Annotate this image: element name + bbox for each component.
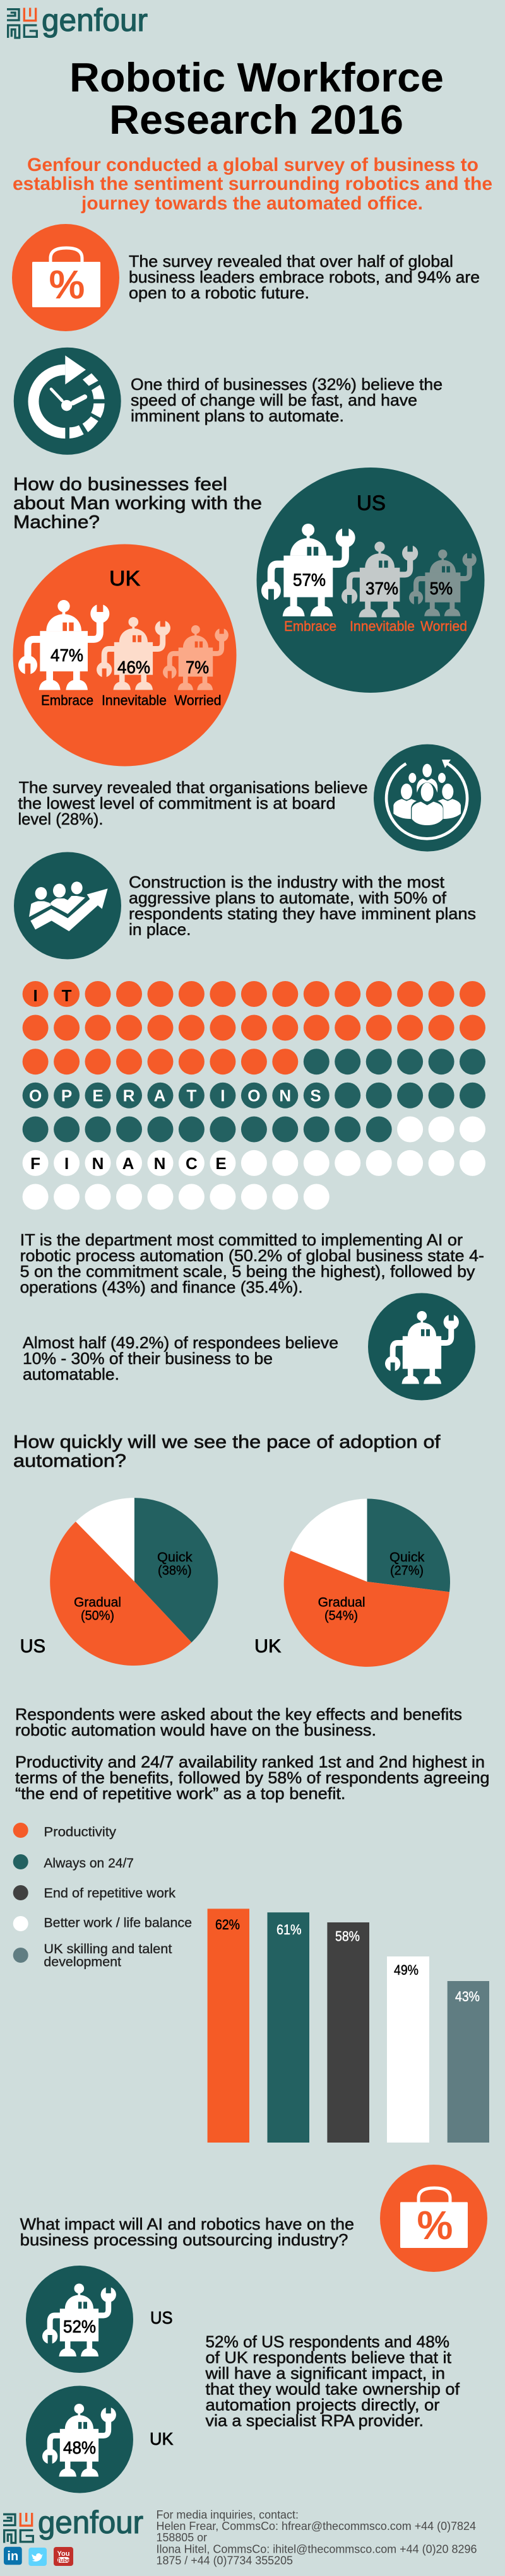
- icon: YouTube: You: [57, 2550, 69, 2558]
- legend: productivity: [13, 1823, 116, 1840]
- bar: always on: 61%: [276, 1922, 302, 1938]
- intro subtitle: journey towards the automated office.: [81, 193, 423, 214]
- text: construction industry: Construction is the industry with the most: [129, 873, 445, 891]
- heading: man working with the machine: about Man working with the: [13, 493, 262, 514]
- icon: clock with arrow: [14, 348, 121, 455]
- title: Research 2016: [109, 97, 403, 143]
- legend: UK skilling: development: [44, 1955, 121, 1970]
- legend: UK skilling: [13, 1941, 172, 1970]
- text: board commitment: the lowest level of commitment is at board: [18, 794, 336, 813]
- bar: productivity: [208, 1908, 249, 2143]
- media contact text: Ilona Hitel, CommsCo: ihitel@thecommsco.com +44 (0)20 8296: [157, 2543, 477, 2555]
- letters: OPERATIONS: N: [279, 1086, 291, 1105]
- UK category labels: [41, 693, 221, 708]
- letters: OPERATIONS: R: [123, 1086, 135, 1105]
- letters: FINANCE: N: [92, 1154, 104, 1173]
- heading: BPO impact: business processing outsourcing industry?: [20, 2230, 348, 2249]
- bar: UK skilling: 43%: [455, 1989, 480, 2004]
- letters: OPERATIONS: I: [220, 1086, 225, 1105]
- text: IT department: IT is the department most committed to implementing AI or: [20, 1230, 463, 1249]
- text: IT department: [20, 1230, 484, 1297]
- robot: US inevitable: [342, 541, 418, 617]
- UK percentages: 46%: [117, 657, 150, 677]
- icon: YouTube: [54, 2547, 73, 2566]
- letters: OPERATIONS: T: [186, 1086, 196, 1105]
- UK category labels: Embrace: [41, 693, 93, 708]
- bar chart: benefits: [208, 1908, 489, 2143]
- US pie labels: (50%): [81, 1609, 114, 1623]
- text: productivity ranking: terms of the benefits, followed by 58% of respondents agreeing: [15, 1768, 490, 1787]
- text: IT department: robotic process automation (50.2% of global business state 4-: [20, 1246, 484, 1265]
- text: significant impact: via a specialist RPA provider.: [206, 2411, 424, 2430]
- UK percentages: [50, 645, 209, 677]
- US pie caption: US: [20, 1636, 45, 1657]
- letters: FINANCE: E: [215, 1154, 227, 1173]
- media contact text: Helen Frear, CommsCo: hfrear@thecommsco.com +44 (0)7824: [157, 2520, 476, 2532]
- bar: always on: [268, 1912, 309, 2143]
- heading: man working with the machine: [13, 474, 262, 532]
- UK pie labels: [318, 1550, 425, 1623]
- text: construction industry: respondents stating they have imminent plans: [129, 904, 476, 923]
- header logo: genfour: [42, 3, 148, 38]
- UK pie labels: Quick: [389, 1550, 425, 1565]
- US pie labels: Gradual: [74, 1595, 121, 1610]
- pie chart: US: [50, 1498, 218, 1666]
- icon: robot badge: [368, 1293, 475, 1401]
- legend: always on: [13, 1854, 134, 1871]
- media contact text: 1875 / +44 (0)7734 355205: [157, 2554, 293, 2567]
- UK percentages: 7%: [186, 657, 209, 677]
- text: board commitment: The survey revealed that organisations believe: [19, 778, 368, 797]
- US percentages: 37%: [365, 579, 398, 598]
- robot: US embrace: [261, 524, 355, 616]
- letters: OPERATIONS: P: [61, 1086, 72, 1105]
- US category labels: [284, 618, 467, 634]
- robot badge: UK 48%: 48%: [63, 2438, 96, 2457]
- US label: US: [150, 2308, 173, 2327]
- letters: IT: I: [33, 986, 38, 1005]
- text: significant impact: 52% of US respondents and 48%: [206, 2332, 449, 2351]
- intro subtitle: Genfour conducted a global survey of business to: [27, 155, 478, 175]
- letters: OPERATIONS: A: [154, 1086, 166, 1105]
- text: significant impact: of UK respondents believe that it: [206, 2348, 452, 2367]
- US percentages: 57%: [293, 570, 326, 590]
- text: IT department: operations (43%) and finance (35.4%).: [20, 1278, 303, 1297]
- text: embrace robots: open to a robotic future.: [129, 283, 309, 302]
- text: productivity ranking: “the end of repetitive work” as a top benefit.: [15, 1784, 346, 1803]
- text: significant impact: automation projects directly, or: [206, 2396, 440, 2414]
- text: speed of change: speed of change will be fast, and have: [131, 391, 417, 409]
- heading: man working with the machine: Machine?: [13, 512, 100, 532]
- letters: IT: [33, 986, 72, 1005]
- robot: US worried: [409, 550, 477, 616]
- panel: US sentiment: [256, 468, 485, 693]
- panel: UK sentiment: [13, 544, 236, 766]
- text: board commitment: level (28%).: [18, 809, 104, 828]
- robot badge: US 52%: [26, 2266, 133, 2373]
- heading: man working with the machine: How do businesses feel: [13, 474, 227, 495]
- text: automatable business: 10% - 30% of their business to be: [23, 1349, 273, 1368]
- footer logo: [3, 2505, 143, 2543]
- intro subtitle: establish the sentiment surrounding robotics and the: [13, 173, 492, 194]
- title: Robotic Workforce: [69, 54, 444, 100]
- letters: OPERATIONS: O: [29, 1086, 42, 1105]
- US pie labels: [74, 1550, 193, 1623]
- bar: repetitive work: [327, 1922, 369, 2143]
- chart legend: [13, 1823, 192, 1970]
- letters: FINANCE: [30, 1154, 227, 1173]
- UK category labels: Worried: [174, 693, 221, 708]
- footer logo: genfour: [38, 2505, 143, 2540]
- US category labels: Innevitable: [350, 618, 415, 634]
- UK pie labels: (27%): [390, 1563, 424, 1578]
- text: key effects: Respondents were asked about the key effects and benefits: [15, 1705, 462, 1724]
- heading: BPO impact: What impact will AI and robotics have on the: [20, 2214, 354, 2233]
- text: embrace robots: [129, 252, 480, 302]
- text: embrace robots: business leaders embrace robots, and 94% are: [129, 268, 480, 286]
- legend: UK skilling: UK skilling and talent: [44, 1941, 172, 1956]
- icon: percent shopping bag: %: [49, 262, 85, 307]
- robot: UK worried: [163, 625, 229, 690]
- UK category labels: Innevitable: [102, 693, 167, 708]
- US percentages: 5%: [430, 579, 453, 598]
- UK pie labels: (54%): [324, 1609, 358, 1623]
- media contact text: [157, 2508, 477, 2567]
- text: significant impact: that they would take ownership of: [206, 2380, 460, 2399]
- text: automatable business: [23, 1333, 338, 1384]
- US category labels: Worried: [420, 618, 467, 634]
- letters: FINANCE: C: [186, 1154, 198, 1173]
- robot: UK inevitable: [97, 617, 170, 690]
- icon: percent shopping bag: [12, 224, 119, 331]
- text: significant impact: will have a significant impact, in: [205, 2364, 445, 2383]
- text: construction industry: [129, 873, 476, 939]
- icon: LinkedIn: in: [7, 2550, 18, 2563]
- robot badge: UK 48%: [26, 2386, 133, 2493]
- icon: team in a cycle: [374, 744, 481, 852]
- letters: OPERATIONS: [29, 1086, 321, 1105]
- letters: OPERATIONS: E: [92, 1086, 104, 1105]
- bar: work life balance: 49%: [394, 1962, 419, 1978]
- text: key effects: robotic automation would have on the business.: [15, 1720, 376, 1739]
- intro subtitle: [13, 155, 492, 214]
- heading: pace of adoption: automation?: [13, 1451, 126, 1471]
- text: productivity ranking: [15, 1753, 490, 1803]
- heading: pace of adoption: How quickly will we see the pace of adoption of: [13, 1432, 441, 1452]
- letters: FINANCE: I: [64, 1154, 69, 1173]
- legend: repetitive work: End of repetitive work: [44, 1886, 175, 1901]
- text: significant impact: [205, 2332, 460, 2430]
- robot badge: US 52%: 52%: [63, 2317, 96, 2336]
- text: embrace robots: The survey revealed that over half of global: [129, 252, 453, 271]
- text: key effects: [15, 1705, 462, 1739]
- media contact text: 158805 or: [157, 2531, 207, 2544]
- US label: US: [357, 491, 386, 515]
- heading: BPO impact: [20, 2214, 354, 2249]
- legend: always on: Always on 24/7: [44, 1856, 134, 1871]
- UK label: UK: [150, 2429, 174, 2449]
- text: board commitment: [18, 778, 368, 828]
- US percentages: [293, 570, 453, 598]
- pie chart: UK: [284, 1499, 450, 1667]
- icon: percent shopping bag: %: [417, 2203, 453, 2248]
- icon: Twitter: [28, 2548, 47, 2566]
- text: speed of change: One third of businesses (32%) believe the: [131, 375, 443, 394]
- icon: LinkedIn: [4, 2547, 22, 2565]
- media contact text: For media inquiries, contact:: [157, 2508, 299, 2521]
- UK percentages: 47%: [50, 645, 83, 665]
- text: IT department: 5 on the commitment scale, 5 being the highest), followed by: [20, 1262, 475, 1281]
- text: speed of change: [131, 375, 443, 425]
- bar: work life balance: [387, 1956, 429, 2143]
- letters: FINANCE: N: [154, 1154, 165, 1173]
- text: construction industry: aggressive plans to automate, with 50% of: [129, 888, 447, 907]
- bar: UK skilling: [448, 1981, 489, 2143]
- UK pie labels: Gradual: [318, 1595, 365, 1610]
- bar: repetitive work: 58%: [335, 1928, 360, 1944]
- letters: FINANCE: F: [30, 1154, 40, 1173]
- icon: people with rising arrow: [14, 852, 121, 959]
- text: automatable business: Almost half (49.2%) of respondees believe: [23, 1333, 338, 1352]
- icon: percent shopping bag: [380, 2165, 487, 2272]
- dots: finance: [23, 1117, 485, 1210]
- bar: productivity: 62%: [215, 1917, 240, 1932]
- dots: operations: [23, 1049, 485, 1142]
- letters: FINANCE: A: [122, 1154, 134, 1173]
- UK pie caption: UK: [254, 1636, 281, 1657]
- text: construction industry: in place.: [129, 920, 191, 939]
- robot: UK embrace: [18, 600, 109, 690]
- US pie labels: (38%): [158, 1563, 192, 1578]
- letters: OPERATIONS: S: [310, 1086, 321, 1105]
- US pie labels: Quick: [157, 1550, 193, 1565]
- text: speed of change: imminent plans to automate.: [131, 406, 344, 425]
- text: automatable business: automatable.: [23, 1365, 119, 1384]
- letters: IT: T: [62, 986, 72, 1005]
- text: productivity ranking: Productivity and 24/7 availability ranked 1st and 2nd highest in: [15, 1753, 485, 1772]
- US category labels: Embrace: [284, 618, 336, 634]
- UK label: UK: [109, 567, 140, 590]
- letters: OPERATIONS: O: [247, 1086, 261, 1105]
- legend: work life balance: Better work / life balance: [44, 1915, 192, 1931]
- dots: IT: [23, 981, 485, 1074]
- icon: YouTube: Tube: [57, 2557, 70, 2563]
- heading: pace of adoption: [13, 1432, 441, 1471]
- title: [69, 54, 444, 143]
- legend: productivity: Productivity: [44, 1825, 116, 1840]
- dot matrix chart: department commitment: [23, 981, 485, 1210]
